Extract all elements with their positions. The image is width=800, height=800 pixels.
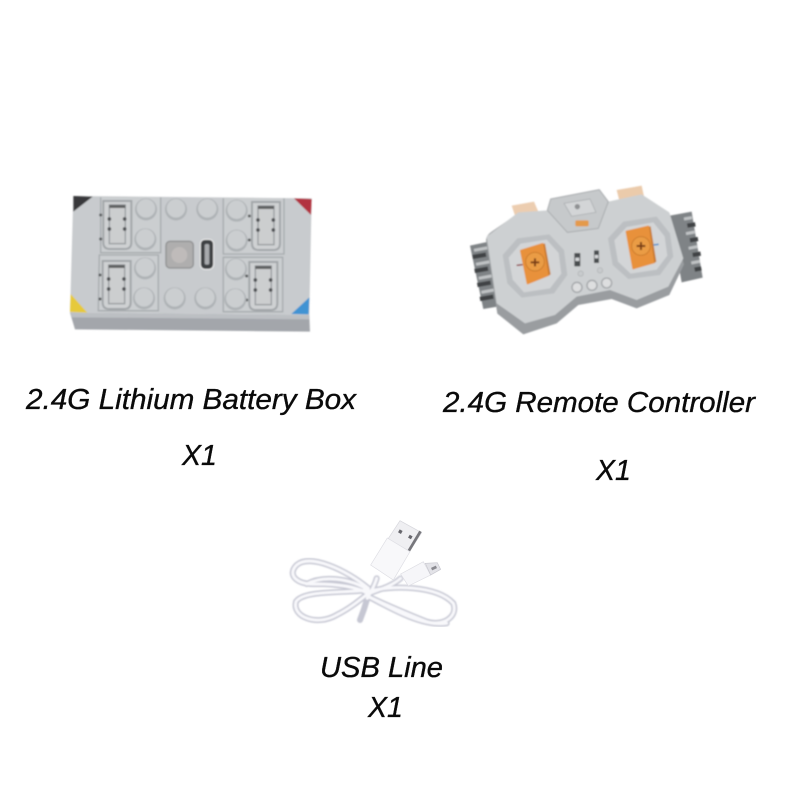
shoulder buttons <box>512 202 538 216</box>
label: battery box quantity: X1 <box>181 440 217 472</box>
label: USB line quantity: X1 <box>367 692 403 724</box>
center switches <box>574 253 580 266</box>
side grips <box>470 241 503 309</box>
label: battery box name: 2.4G Lithium Battery Box <box>25 384 358 416</box>
micro USB plug <box>401 562 431 586</box>
icon: USB cable <box>293 521 454 624</box>
top panel <box>547 190 608 232</box>
battery top face <box>70 196 312 315</box>
label: remote controller name: 2.4G Remote Controller <box>442 387 757 419</box>
controller body side <box>486 196 684 334</box>
label: USB line name: USB Line <box>320 652 443 684</box>
controller body top <box>487 194 683 323</box>
battery side face <box>70 313 310 332</box>
right joystick <box>608 217 673 279</box>
USB plug <box>387 521 422 553</box>
icon: battery box <box>70 196 312 332</box>
label: remote controller quantity: X1 <box>595 455 631 487</box>
icon: remote controller <box>470 186 703 334</box>
left joystick <box>503 234 567 298</box>
